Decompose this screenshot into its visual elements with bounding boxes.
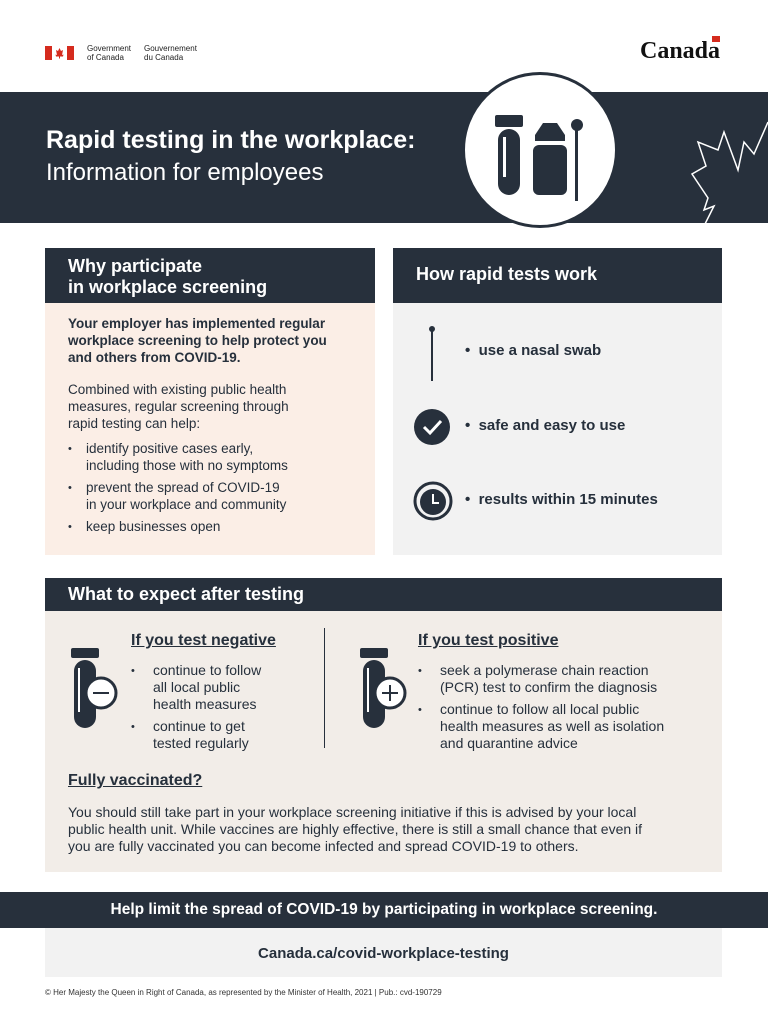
- gov logo: du Canada: [144, 53, 183, 62]
- panel: how rapid tests work: • safe and easy to use: [465, 417, 625, 434]
- panel: what to expect: (PCR) test to confirm the diagnosis: [440, 679, 657, 695]
- panel: what to expect: What to expect after testing: [68, 584, 304, 604]
- panel: why participate: including those with no symptoms: [86, 458, 288, 473]
- panel: why participate: rapid testing can help:: [68, 416, 200, 431]
- header band: [0, 92, 768, 223]
- copyright: © Her Majesty the Queen in Right of Canada, as represented by the Minister of Health, 2021 | Pub.: cvd-190729: [45, 988, 442, 997]
- panel: what to expect: If you test positive: [418, 632, 558, 649]
- panel: why participate: Why participate: [68, 256, 202, 276]
- panel: what to expect: health measures as well as isolation: [440, 718, 664, 734]
- gov logo: Gouvernement: [144, 44, 197, 53]
- icon: swab: [429, 326, 435, 381]
- link box: Canada.ca/covid-workplace-testing: [258, 945, 509, 962]
- subtitle: Information for employees: [46, 159, 323, 186]
- panel: why participate: prevent the spread of COVID-19: [86, 480, 280, 495]
- panel: why participate: keep businesses open: [86, 519, 220, 534]
- panel: what to expect: public health unit. While vaccines are highly effective, there is still a small chance that even if: [68, 821, 642, 837]
- fully vaccinated: Fully vaccinated?: [68, 772, 202, 789]
- panel: how rapid tests work: [393, 248, 722, 555]
- gov logo: Government: [87, 44, 131, 53]
- panel: what to expect: If you test negative: [131, 632, 276, 649]
- footer band: [0, 892, 768, 928]
- panel: what to expect: continue to get: [153, 718, 245, 734]
- panel: why participate: in your workplace and community: [86, 497, 286, 512]
- panel: what to expect: health measures: [153, 696, 257, 712]
- panel: what to expect: and quarantine advice: [440, 735, 578, 751]
- gov logo: of Canada: [87, 53, 124, 62]
- icon: clock: [414, 482, 452, 520]
- icon: positive tube: [360, 648, 406, 728]
- panel: how rapid tests work: • results within 15 minutes: [465, 491, 658, 508]
- gov logo: [45, 44, 197, 62]
- panel: why participate: Combined with existing public health: [68, 382, 286, 397]
- panel: what to expect: tested regularly: [153, 735, 249, 751]
- panel: why participate: measures, regular screening through: [68, 399, 289, 414]
- panel: what to expect: seek a polymerase chain reaction: [440, 662, 649, 678]
- panel: what to expect: you are fully vaccinated you can become infected and spread COVID-19 to others.: [68, 838, 579, 854]
- link box: [45, 928, 722, 977]
- panel: how rapid tests work: • use a nasal swab: [465, 342, 601, 359]
- panel: why participate: identify positive cases early,: [86, 441, 253, 456]
- icon: negative tube: [71, 648, 118, 728]
- panel: why participate: [45, 248, 375, 555]
- canada wordmark: Canada: [640, 38, 720, 64]
- icon: test kit circle: [462, 72, 618, 228]
- panel: what to expect: continue to follow all local public: [440, 701, 639, 717]
- panel: why participate: in workplace screening: [68, 277, 267, 297]
- panel: how rapid tests work: How rapid tests work: [416, 264, 597, 284]
- panel: what to expect: all local public: [153, 679, 240, 695]
- footer band: Help limit the spread of COVID-19 by participating in workplace screening.: [111, 901, 657, 918]
- maple leaf outline: [691, 122, 768, 223]
- icon: check: [414, 409, 450, 445]
- panel: why participate: Your employer has implemented regular workplace screening to help protect you and others from COVID-19.: [68, 316, 327, 365]
- panel: what to expect: [45, 578, 722, 872]
- panel: what to expect: You should still take part in your workplace screening initiative if this is advised by your local: [68, 804, 636, 820]
- title: Rapid testing in the workplace:: [46, 126, 416, 154]
- panel: what to expect: continue to follow: [153, 662, 261, 678]
